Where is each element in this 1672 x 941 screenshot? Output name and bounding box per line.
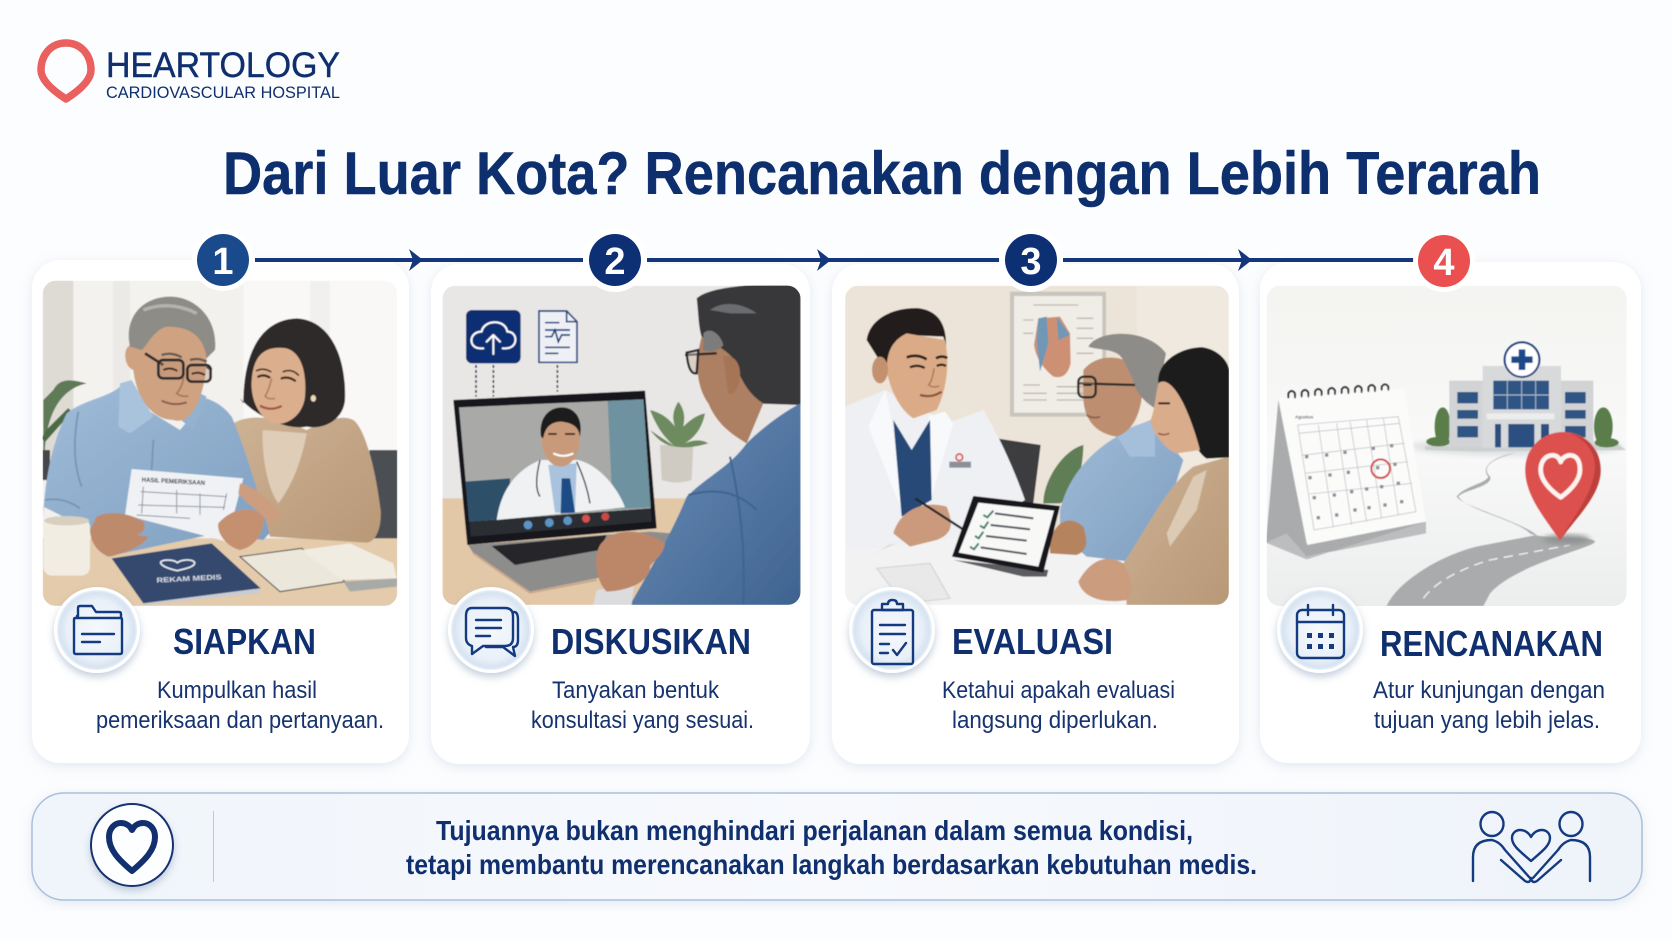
- text: closing message: [406, 815, 1257, 880]
- logo: Heartology Cardiovascular Hospital: CARDIOVASCULAR HOSPITAL: [106, 84, 340, 102]
- step number 1: 1: [212, 241, 234, 283]
- panel: step 2 diskusikan: [431, 264, 810, 764]
- text: siapkan description: Kumpulkan hasil: [157, 677, 317, 704]
- panel: step 1 siapkan: [32, 260, 409, 763]
- icon: calendar: [1278, 588, 1362, 672]
- title: Dari Luar Kota? Rencanakan dengan Lebih Terarah: [223, 140, 1541, 207]
- text: evaluasi description: Ketahui apakah evaluasi: [942, 677, 1175, 704]
- panel: step 3 evaluasi: [832, 264, 1239, 764]
- heading: evaluasi: EVALUASI: [952, 621, 1113, 662]
- photo: couple reviewing medical results: [43, 281, 397, 606]
- step number 4: [1413, 230, 1475, 292]
- icon: two people with heart: [1473, 812, 1590, 882]
- photo: calendar, hospital and map pin: [1266, 286, 1627, 606]
- step number 2: 2: [604, 241, 626, 283]
- arrow: step 3 to step 4: [1063, 249, 1418, 271]
- text: siapkan description: pemeriksaan dan pertanyaan.: [96, 707, 384, 734]
- text: diskusikan description: [531, 677, 754, 734]
- photo: couple reviewing medical results: HASIL PEMERIKSAAN: [142, 477, 206, 487]
- step number 1: [192, 229, 254, 291]
- logo: Heartology Cardiovascular Hospital: HEARTOLOGY: [106, 46, 340, 85]
- heading: diskusikan: DISKUSIKAN: [551, 621, 751, 662]
- text: closing message: tetapi membantu merencanakan langkah berdasarkan kebutuhan medis.: [406, 849, 1257, 880]
- photo: couple reviewing medical results: REKAM MEDIS: [156, 574, 222, 585]
- step number 2: [583, 228, 647, 292]
- panel: step 4 rencanakan: [1260, 262, 1641, 763]
- photo: calendar, hospital and map pin: Agustus: [1295, 414, 1314, 420]
- text: evaluasi description: [942, 677, 1175, 734]
- text: siapkan description: [96, 677, 384, 734]
- text: diskusikan description: konsultasi yang sesuai.: [531, 707, 754, 734]
- arrow: step 1 to step 2: [255, 249, 583, 271]
- photo: video consultation on laptop: [442, 285, 801, 605]
- text: rencanakan description: tujuan yang lebih jelas.: [1374, 707, 1600, 734]
- step number 3: 3: [1020, 241, 1042, 283]
- icon: clipboard checklist: [850, 588, 934, 672]
- icon: folder: [56, 588, 138, 672]
- text: closing message: Tujuannya bukan menghindari perjalanan dalam semua kondisi,: [436, 815, 1193, 846]
- logo: Heartology Cardiovascular Hospital: [41, 43, 340, 102]
- text: rencanakan description: [1373, 677, 1605, 734]
- arrow: step 2 to step 3: [647, 249, 1005, 271]
- text: rencanakan description: Atur kunjungan dengan: [1373, 677, 1605, 704]
- heading: rencanakan: RENCANAKAN: [1380, 623, 1603, 664]
- text: diskusikan description: Tanyakan bentuk: [552, 677, 720, 704]
- icon: chat bubbles: [450, 588, 532, 672]
- step number 3: [999, 228, 1063, 292]
- photo: doctor explaining to couple with tablet: [845, 286, 1229, 605]
- panel: closing message banner: [32, 793, 1642, 900]
- step number 4: 4: [1433, 242, 1455, 284]
- text: evaluasi description: langsung diperlukan.: [952, 707, 1158, 734]
- icon: heart badge: [91, 804, 173, 886]
- heading: siapkan: SIAPKAN: [173, 621, 316, 662]
